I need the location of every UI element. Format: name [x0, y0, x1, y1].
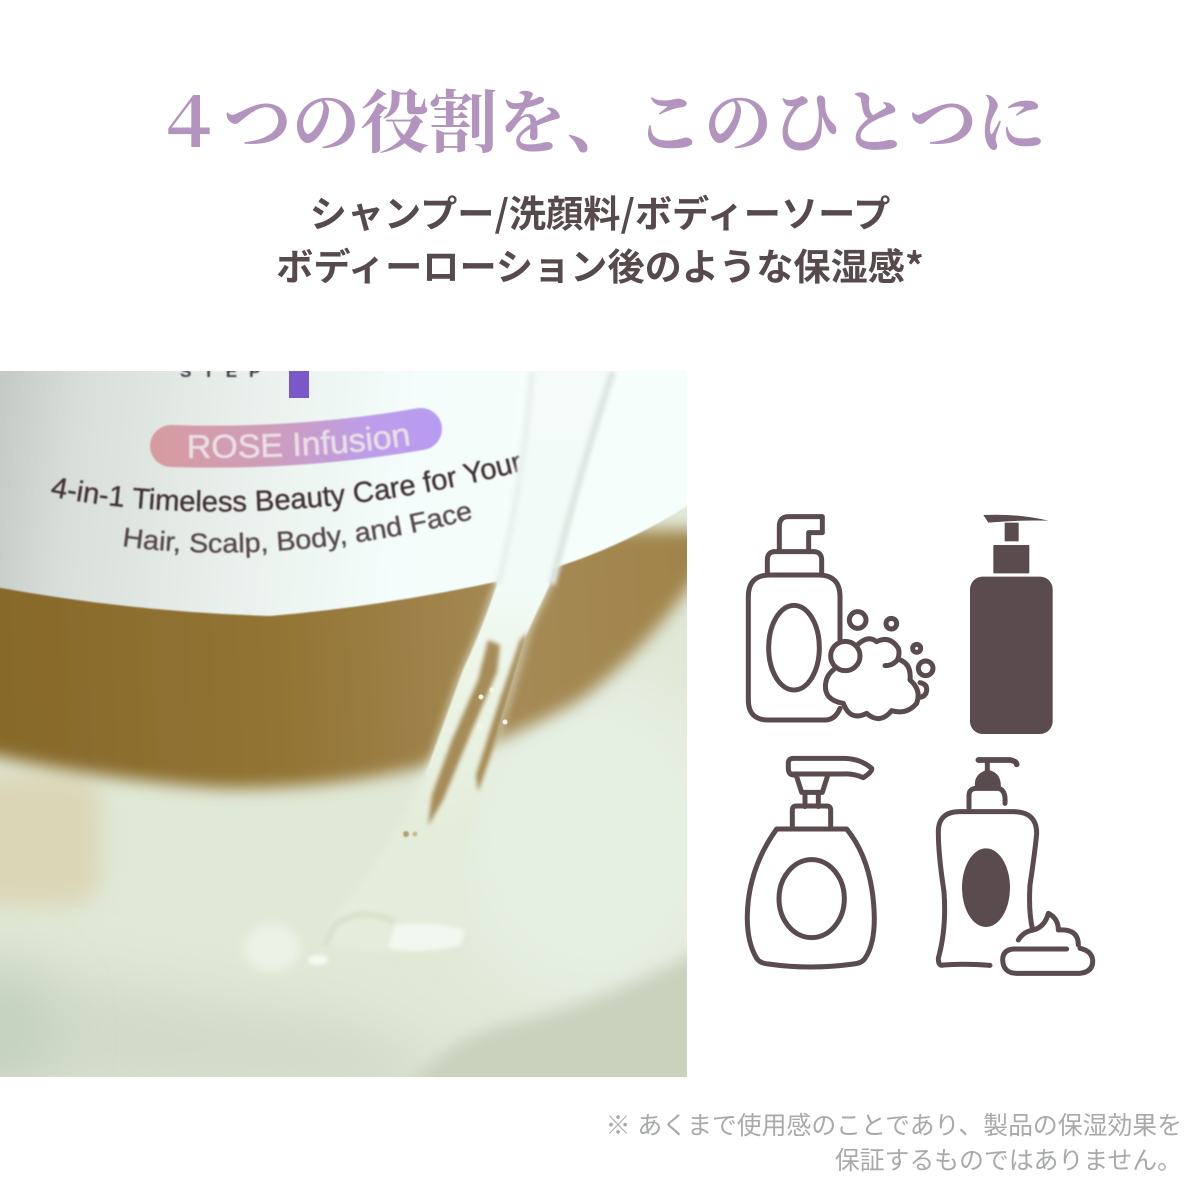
footnote: ※ あくまで使用感のことであり、製品の保湿効果を: [606, 1113, 1182, 1140]
photo: label top lettering and bar: STEP: [180, 362, 272, 381]
subtitle: [276, 184, 924, 290]
photo: product bottle with pouring liquid: [0, 371, 687, 1077]
icon: pump bottle with foam: [748, 517, 933, 720]
photo: label tagline: Hair, Scalp, Body, and Face: [123, 505, 472, 559]
footnote: [606, 1112, 1182, 1175]
subtitle: シャンプー/洗顔料/ボディーソープ: [310, 184, 890, 238]
photo: ROSE Infusion badge: [149, 407, 443, 468]
photo: label tagline: [50, 454, 520, 559]
footnote: 保証するものではありません。: [835, 1148, 1182, 1175]
photo: white bottle label: [0, 360, 700, 616]
photo: amber liquid in bottle: [0, 530, 720, 788]
title: ４つの役割を、このひとつに: [154, 86, 1046, 162]
photo: pouring liquid stream: [244, 371, 613, 972]
icon: rounded pump bottle: [747, 758, 874, 967]
photo: label top lettering and bar: [180, 371, 309, 398]
subtitle: ボディーローション後のような保湿感*: [276, 236, 924, 290]
photo: ROSE Infusion badge: ROSE Infusion: [188, 426, 410, 459]
photo background: basin: [0, 506, 687, 1077]
icon: curvy pump bottle with cream: [938, 760, 1093, 973]
icon: solid pump bottle: [970, 515, 1053, 734]
photo: label tagline: 4-in-1 Timeless Beauty Care for Your: [50, 454, 520, 513]
